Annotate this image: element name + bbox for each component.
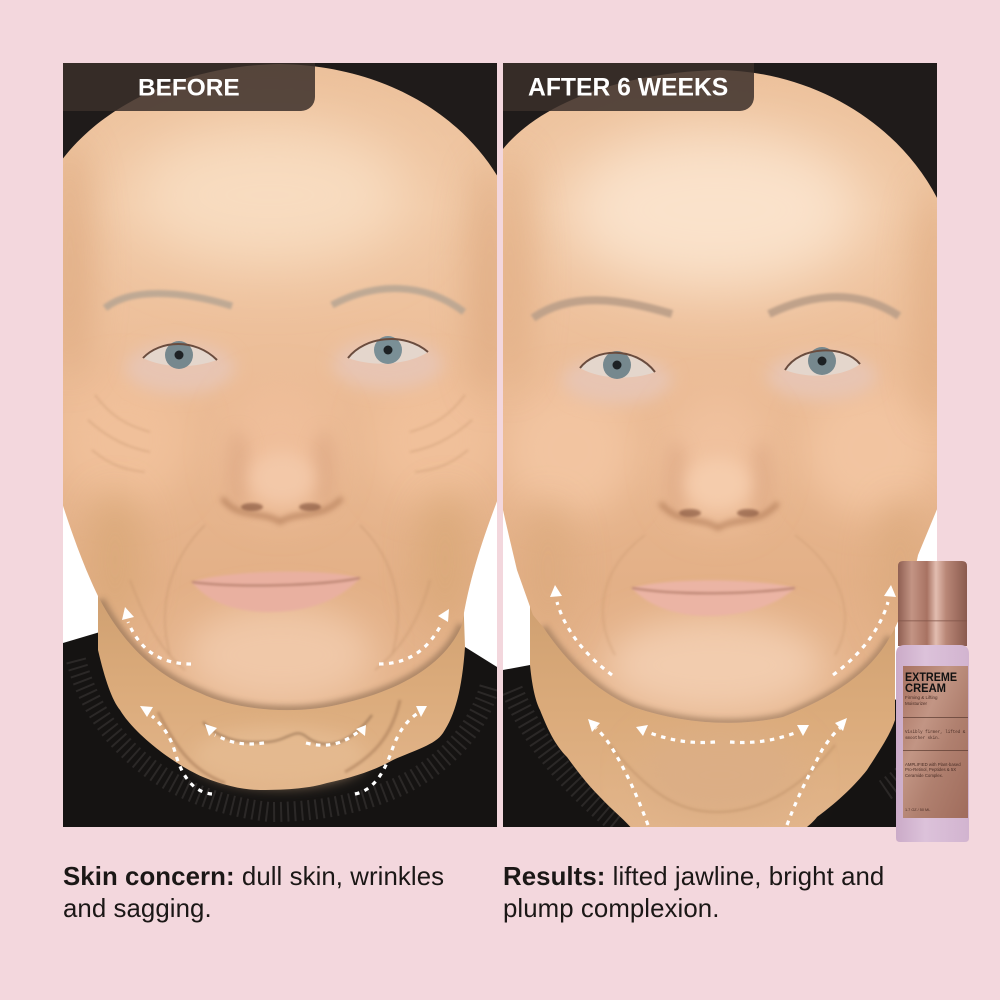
bottle label: Ceramide Complex. <box>905 773 943 778</box>
panel: after photo <box>488 60 957 830</box>
caption: skin concern: Skin concern: dull skin, wrinkles <box>63 863 444 891</box>
bottle label <box>903 666 968 818</box>
wrinkles: after <box>610 644 614 654</box>
mouth: before <box>192 572 360 612</box>
bottle label: AMPLIFIED with Plant-based <box>905 762 961 767</box>
garment collar: after <box>503 665 937 827</box>
label: after 6 weeks <box>503 63 754 111</box>
nose: before <box>219 436 344 526</box>
eye left: after <box>562 351 672 404</box>
bottle label: smoother skin. <box>905 736 940 741</box>
caption: skin concern: and sagging. <box>63 895 212 923</box>
label: before: BEFORE <box>138 74 240 102</box>
neck: before <box>98 590 465 790</box>
caption: skin concern <box>63 863 444 923</box>
eyebrow left: after <box>533 300 672 318</box>
neck: after <box>530 600 895 830</box>
caption: results: Results: lifted jawline, bright and <box>503 863 884 891</box>
face: before <box>48 60 512 730</box>
eyebrow left: before <box>105 294 232 308</box>
bottle label: 1.7 OZ / 50 ML <box>905 808 930 812</box>
hair wrap: before <box>63 63 497 176</box>
eye right: after <box>767 347 877 400</box>
eye left: before <box>125 341 235 394</box>
bottle label: CREAM <box>905 683 946 695</box>
bottle cap <box>898 561 967 646</box>
arrows: after <box>557 602 888 825</box>
caption: results: plump complexion. <box>503 895 719 923</box>
nose: after <box>660 395 778 528</box>
bottle label: Moisturizer <box>905 701 928 706</box>
panel: before photo <box>48 60 512 827</box>
bottle label: Visibly firmer, lifted & <box>905 730 966 735</box>
arrows: before <box>128 622 441 794</box>
hair wrap: after <box>503 63 937 198</box>
face: after <box>488 60 957 730</box>
bottle label: Pro-Retinol, Peptides & 5X <box>905 767 956 772</box>
eye right: before <box>333 336 443 390</box>
bottle label: Firming & Lifting <box>905 695 938 700</box>
garment collar: before <box>63 632 497 827</box>
eyebrow right: after <box>769 297 899 316</box>
label: before <box>63 63 315 111</box>
eyebrow right: before <box>332 289 464 312</box>
bottle label: EXTREME <box>905 672 957 684</box>
mouth: after <box>632 580 795 616</box>
label: after 6 weeks: AFTER 6 WEEKS <box>528 74 728 102</box>
bottle body <box>896 645 969 842</box>
product: extreme cream bottle <box>896 561 969 842</box>
caption: results <box>503 863 884 923</box>
wrinkles: before <box>88 395 472 670</box>
